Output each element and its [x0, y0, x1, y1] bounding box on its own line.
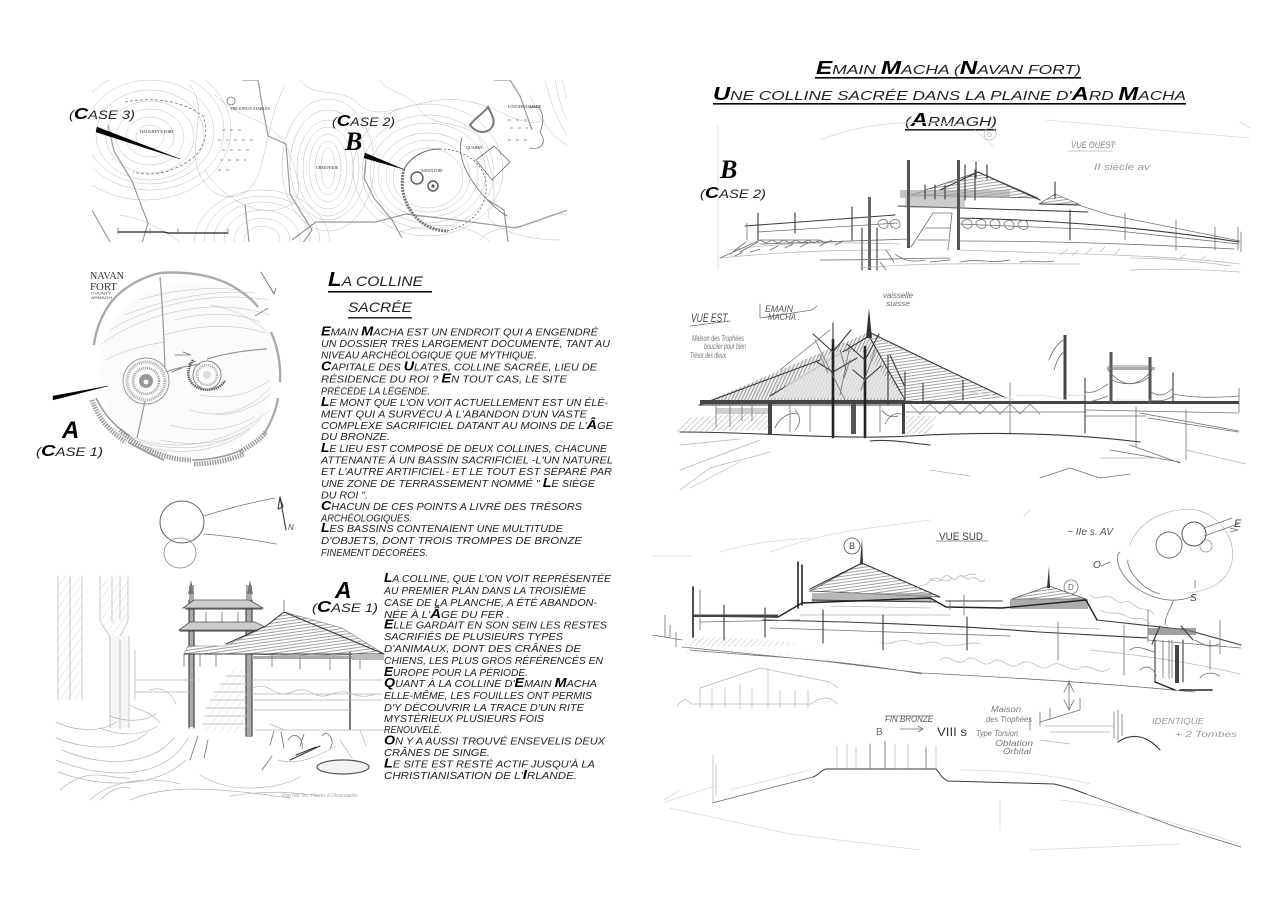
sketch: east view, great roofed house: EMAIN [765, 304, 793, 314]
gate [1148, 628, 1196, 635]
circular steps [56, 689, 290, 800]
mini compass plan [1093, 509, 1242, 604]
text block: La colline sacrée body: MENT QUI A SURVÉCU À L'ABANDON D'UN VASTE [321, 408, 587, 420]
small fence detail [1030, 698, 1122, 740]
building walls [768, 404, 772, 434]
small plan sketch with north arrow [160, 497, 294, 568]
text block: the hill case 1 description: LA COLLINE, QUE L'ON VOIT REPRÉSENTÉE [384, 570, 611, 585]
sketch callout: B case 2: (CASE 2) [700, 185, 766, 202]
sketch: east view, great roofed house [676, 304, 1246, 490]
panel: circular plan of Navan Fort [90, 270, 280, 464]
small roof [1012, 586, 1086, 599]
plan callout: A case 1: (CASE 1) [36, 443, 103, 460]
text block: the hill case 1 description: QUANT À LA COLLINE D' EMAIN MACHA [384, 675, 597, 690]
side notes: FIN BRONZE [885, 714, 934, 724]
text block: the hill case 1 description [383, 570, 611, 782]
sketch: west view of the hill (case 2): suisse [886, 301, 910, 308]
map callout: case 2 B: (CASE 2) [332, 113, 395, 130]
mini compass plan: O [1093, 560, 1101, 571]
sketch: south view with twin mounds: ~ IIe s. AV [1067, 527, 1114, 538]
sketch: hill A foreground scene (case 1): Rog Nor Tec, Pierres à Observatoire [282, 793, 358, 799]
sketch: south view with twin mounds: IDENTIQUE [1152, 717, 1205, 726]
text block: La colline sacrée body: CHACUN DE CES POINTS A LIVRÉ DES TRÉSORS [321, 498, 582, 513]
sketch: west view of the hill (case 2): VUE OUEST [1071, 140, 1116, 150]
title: Emain Macha: U NE COLLINE SACRÉE DANS LA PLAINE D' A RD M ACHA [713, 84, 1186, 104]
text block: the hill case 1 description: NÉE À L' ÂGE DU FER . [384, 606, 510, 621]
text block: La colline sacrée body: LE MONT QUE L'ON VOIT ACTUELLEMENT EST UN ÉLÉ- [321, 394, 609, 409]
sketch: south view with twin mounds: VUE SUD [939, 531, 983, 543]
two-tiered gate [179, 580, 271, 737]
long wall and fence [904, 401, 1239, 404]
sketch: bare mound profile with fence [664, 740, 1241, 850]
roof [699, 332, 1006, 405]
panel: circular plan of Navan Fort: NAVAN [90, 270, 124, 282]
foliage scribbles [915, 574, 1154, 624]
panel: circular plan of Navan Fort: COUNTY [91, 290, 111, 296]
text block: the hill case 1 description: SACRIFIÉS DE PLUSIEURS TYPES [384, 630, 563, 643]
title: Emain Macha: E MAIN M ACHA ( N AVAN FORT) [816, 58, 1081, 78]
sketch: hill A foreground scene (case 1) [56, 576, 385, 800]
text block: La colline sacrée body: DU BRONZE. [321, 432, 390, 443]
panel: contour map of the Navan area: NAVAN FORT [421, 169, 444, 173]
sketch: east view, great roofed house: MACHA . [768, 312, 800, 322]
sketch: south view with twin mounds: des Trophées [986, 715, 1032, 724]
panel: contour map of the Navan area: THE KING'S STABLES [230, 106, 270, 111]
text block: the hill case 1 description: CHRISTIANISATION DE L' IRLANDE. [384, 767, 577, 782]
text block: La colline sacrée body: LES BASSINS CONTENAIENT UNE MULTITUDE [321, 520, 563, 535]
scene callout: A case 1: A [334, 577, 352, 603]
text block: La colline sacrée body: FINEMENT DÉCORÉES. [321, 546, 428, 559]
text block: La colline sacrée body: ARCHÉOLOGIQUES. [320, 512, 412, 524]
text block: La colline sacrée body: UNE ZONE DE TERRASSEMENT NOMMÉ " LE SIÈGE [321, 475, 595, 490]
text block: the hill case 1 description: CHIENS, LES PLUS GROS RÉFÉRENCÉS EN [384, 654, 604, 667]
trees at the front [833, 340, 865, 437]
hill walls [745, 215, 1239, 242]
mini compass plan: E [1234, 518, 1242, 530]
plan callout: A case 1 [36, 386, 108, 460]
sketch: west view of the hill (case 2): D [987, 132, 992, 139]
text block: La colline sacrée body [320, 324, 613, 559]
text block: La colline sacrée body: COMPLEXE SACRIFICIEL DATANT AU MOINS DE L' ÂGE [321, 417, 613, 432]
sketch callout: B case 2: B [719, 155, 737, 184]
text block: La colline sacrée body: CAPITALE DES ULATES, COLLINE SACRÉE, LIEU DE [321, 358, 597, 374]
text block: La colline sacrée body: D'OBJETS, DONT TROIS TROMPES DE BRONZE [321, 536, 582, 547]
sketch: south view with twin mounds: Oblation [995, 739, 1034, 748]
panel: contour map of the Navan area: LOUGHNASHADE [508, 104, 542, 109]
main roof [810, 563, 940, 597]
sketch: south view with twin mounds: B [849, 541, 855, 551]
text block: the hill case 1 description: ELLE GARDAIT EN SON SEIN LES RESTES [384, 616, 607, 632]
sketch: east view, great roofed house: bouclier pour bien [704, 342, 746, 351]
text block: La colline sacrée body: ATTENANTE À UN BASSIN SACRIFICIEL -L'UN NATUREL [320, 454, 613, 466]
posts [693, 562, 802, 637]
sketch: east view, great roofed house: VUE EST. [691, 311, 729, 325]
arrow down [1064, 680, 1074, 710]
text block: La colline sacrée body: ET L'AUTRE ARTIFICIEL- ET LE TOUT EST SÉPARÉ PAR [321, 465, 612, 478]
faint lower building [677, 668, 838, 709]
sketch: south view with twin mounds: Type Torsion [976, 729, 1019, 738]
text block: the hill case 1 description: AU PREMIER PLAN DANS LA TROISIÈME [383, 584, 586, 597]
lower walls [763, 620, 1148, 638]
ramp [911, 213, 952, 250]
text block: the hill case 1 description: LE SITE EST RESTÉ ACTIF JUSQU'À LA [384, 756, 595, 770]
map callout: case 2 B: B [344, 127, 362, 156]
panel: circular plan of Navan Fort: FORT [90, 281, 117, 293]
vegetation and bowl [100, 724, 385, 800]
panel: contour map of the Navan area: QUARRY [466, 145, 483, 150]
main roof [911, 172, 1038, 198]
panel: contour map of the Navan area: HAUGHEY'S FORT [140, 129, 174, 134]
sketch: south view with twin mounds: VIII s [937, 725, 967, 739]
sketch: west view of the hill (case 2): vaisselle [883, 291, 914, 300]
title: Emain Macha [713, 58, 1186, 131]
sketch: south view with twin mounds: + 2 Tombes [1175, 730, 1237, 739]
sketch: west view of the hill (case 2) [718, 120, 1250, 308]
sketch: south view with twin mounds: Maison [991, 705, 1022, 714]
text block: the hill case 1 description: ON Y A AUSSI TROUVÉ ENSEVELIS DEUX [384, 732, 605, 748]
sketch: south view with twin mounds: D [1068, 583, 1074, 592]
map callout: case 2 B [332, 113, 403, 169]
title: Emain Macha: (A RMAGH) [905, 110, 997, 130]
heading: La colline sacrée: LA COLLINE [328, 269, 424, 291]
text block: the hill case 1 description: D'ANIMAUX, DONT DES CRÂNES DE [384, 642, 581, 655]
text block: La colline sacrée body: PRÉCÈDE LA LÉGENDE. [321, 384, 430, 398]
map callout: case 3 [69, 106, 180, 159]
text block: La colline sacrée body: RÉSIDENCE DU ROI ? EN TOUT CAS, LE SITE [321, 370, 567, 386]
plan callout: A case 1: A [61, 417, 79, 444]
panel: contour map of the Navan area [92, 80, 567, 242]
heading: La colline sacrée: SACRÉE [348, 299, 413, 315]
text block: the hill case 1 description: MYSTÉRIEUX PLUSIEURS FOIS [384, 712, 544, 725]
ground [720, 240, 950, 260]
text block: the hill case 1 description: RENOUVELÉ. [384, 723, 442, 736]
text block: La colline sacrée body: UN DOSSIER TRÈS LARGEMENT DOCUMENTÉ, TANT AU [321, 337, 611, 350]
sketch: south view with twin mounds: Orbital [1003, 747, 1031, 756]
terrace walls and stairs [135, 667, 382, 733]
text block: La colline sacrée body: EMAIN MACHA EST UN ENDROIT QUI A ENGENDRÉ [321, 324, 598, 338]
text block: the hill case 1 description: D'Y DÉCOUVRIR LA TRACE D'UN RITE [384, 701, 584, 714]
small plan sketch with north arrow: N [288, 523, 294, 532]
scene callout: A case 1: (CASE 1) [312, 599, 378, 616]
Navan ring [402, 169, 448, 231]
text block: the hill case 1 description: CRÂNES DE SINGE. [384, 746, 490, 759]
text block: the hill case 1 description: EUROPE POUR LA PÉRIODE. [384, 664, 528, 679]
text block: the hill case 1 description: ELLE-MÊME, LES FOUILLES ONT PERMIS [384, 689, 592, 702]
mini compass plan: S [1190, 593, 1197, 604]
sketch: south view with twin mounds: B [876, 727, 883, 738]
sketch callout: B case 2 [700, 155, 766, 202]
sketch: east view, great roofed house: Maison des Trophées [692, 334, 744, 343]
round roofed hall [184, 600, 384, 730]
poles [907, 160, 910, 248]
text block: La colline sacrée body: NIVEAU ARCHÉOLOGIQUE QUE MYTHIQUE. [321, 348, 537, 362]
text block: La colline sacrée body: DU ROI ". [321, 490, 368, 502]
text block: the hill case 1 description: CASE DE LA PLANCHE, A ÉTÉ ABANDON- [384, 596, 598, 609]
sketch: south view with twin mounds [652, 509, 1242, 756]
ground [680, 432, 1140, 445]
sketch: east view, great roofed house: Trésor des dieux [690, 351, 727, 360]
text block: La colline sacrée body: LE LIEU EST COMPOSÉ DE DEUX COLLINES, CHACUNE [321, 440, 607, 455]
heading: La colline sacrée [328, 269, 432, 319]
sketch: west view of the hill (case 2): II siècle av [1094, 162, 1151, 172]
mound outline [694, 598, 1097, 620]
columns on the left [58, 576, 135, 730]
map callout: case 3: (CASE 3) [69, 106, 135, 123]
scene callout: A case 1 [312, 577, 378, 616]
panel: circular plan of Navan Fort: ARMAGH [91, 295, 112, 300]
panel: contour map of the Navan area: CREEVEKIE [316, 165, 339, 170]
